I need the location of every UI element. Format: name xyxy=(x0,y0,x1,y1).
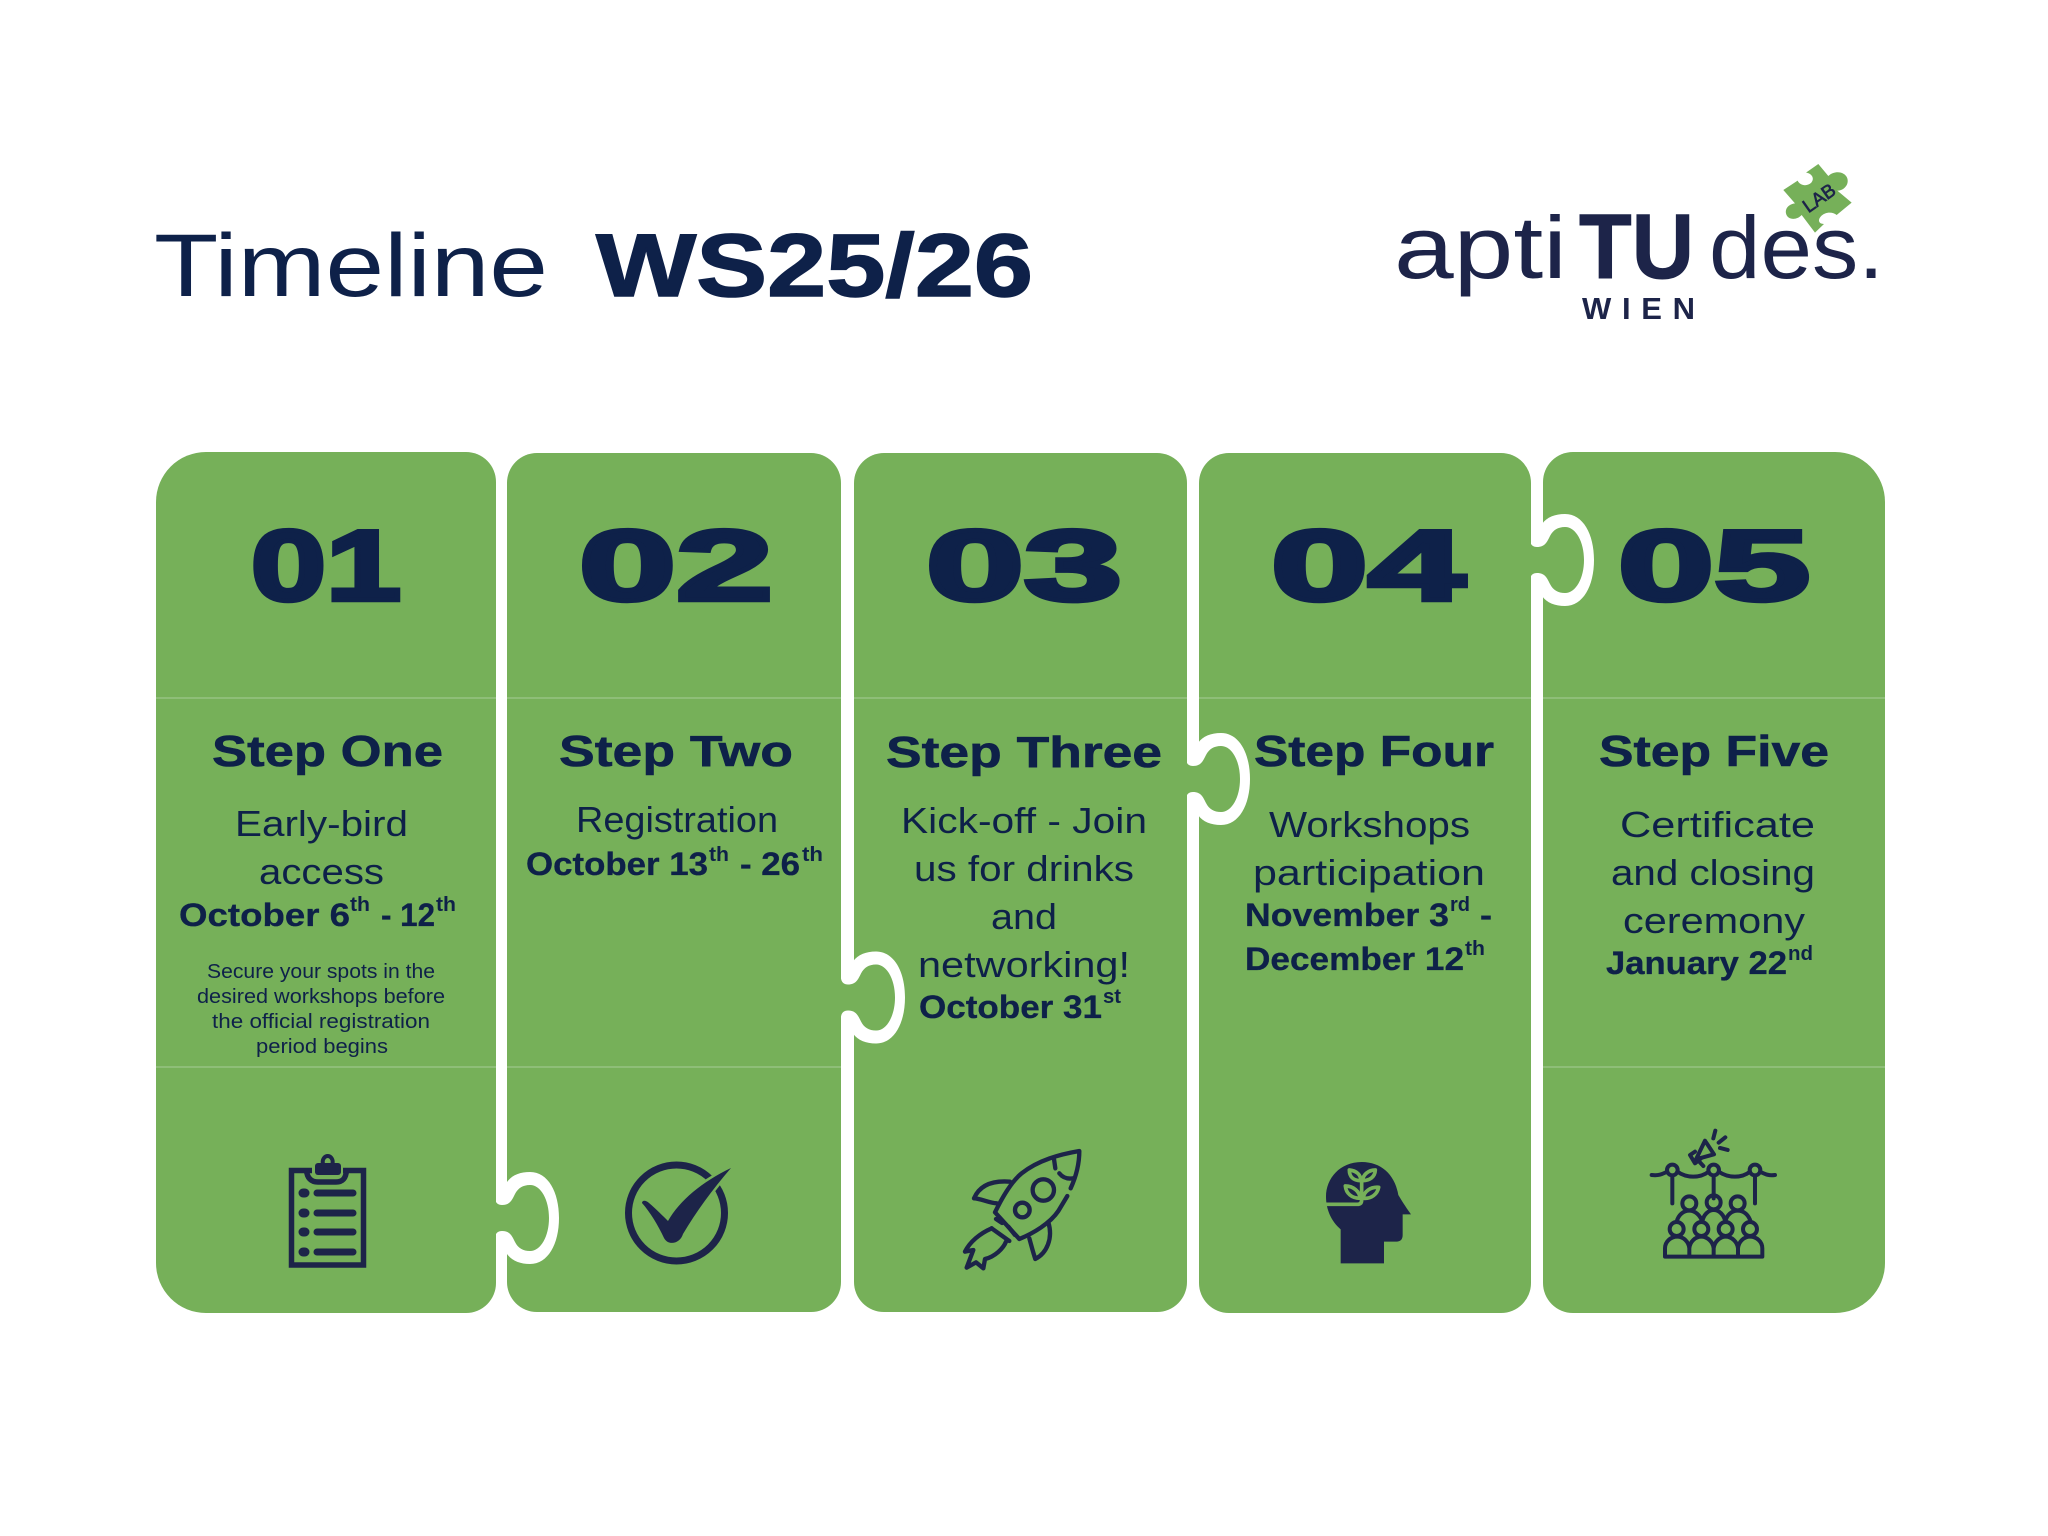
heading: Step Two: Step Two xyxy=(559,727,793,776)
description: and closing xyxy=(1611,852,1815,893)
date: October 13 xyxy=(526,846,708,882)
note: Secure your spots in the xyxy=(207,961,435,983)
note xyxy=(197,961,445,1058)
logo: aptiTUdes WIEN LAB: apti xyxy=(1394,198,1567,297)
panel: step 02 xyxy=(507,453,841,1312)
date: November 3 xyxy=(1245,897,1449,933)
description: ceremony xyxy=(1623,900,1805,941)
description: Kick-off - Join xyxy=(901,800,1147,841)
icon: crowd with megaphone xyxy=(1652,1131,1775,1257)
number 05: 05 xyxy=(1618,510,1810,622)
puzzle tab: step 4 to step 5 xyxy=(1530,514,1594,606)
note: desired workshops before xyxy=(197,986,445,1008)
logo: aptiTUdes WIEN LAB xyxy=(1394,164,1884,326)
puzzle tab: step 3 to step 4 xyxy=(1186,733,1250,825)
description: us for drinks xyxy=(914,848,1134,889)
date: October 6 xyxy=(179,897,350,933)
heading: Step Four: Step Four xyxy=(1254,727,1494,776)
date: st xyxy=(1103,986,1121,1008)
note: period begins xyxy=(256,1036,388,1058)
description: Certificate xyxy=(1620,804,1815,845)
date: - 26 xyxy=(740,846,800,882)
panel: step 05 xyxy=(1543,452,1885,1313)
number 04: 04 xyxy=(1271,510,1466,622)
icon: green puzzle piece: LAB xyxy=(1799,180,1840,217)
description xyxy=(1611,804,1815,941)
icon: head with plant xyxy=(1326,1162,1411,1263)
number 02: 02 xyxy=(579,510,773,622)
description: access xyxy=(259,851,384,892)
title xyxy=(154,215,1033,315)
title: WS25/26 xyxy=(596,215,1033,315)
date: th xyxy=(802,844,823,866)
icon: green puzzle piece xyxy=(1783,164,1852,233)
description: and xyxy=(991,896,1057,937)
date: th xyxy=(709,844,729,866)
panel: step 01 xyxy=(156,452,496,1313)
logo: aptiTUdes WIEN LAB: TU xyxy=(1579,196,1694,298)
note: the official registration xyxy=(212,1011,430,1033)
heading: Step Five: Step Five xyxy=(1599,727,1829,776)
panel: step 03 xyxy=(854,453,1187,1312)
title: Timeline xyxy=(154,215,548,315)
logo: aptiTUdes WIEN LAB: WIEN xyxy=(1582,291,1695,326)
description xyxy=(235,803,408,892)
description xyxy=(901,800,1147,985)
description: networking! xyxy=(918,944,1130,985)
puzzle tab: step 1 to step 2 xyxy=(495,1172,559,1264)
description: participation xyxy=(1253,852,1485,893)
date: nd xyxy=(1788,943,1813,965)
logo: aptiTUdes WIEN LAB: des. xyxy=(1709,198,1884,297)
date: th xyxy=(1465,938,1485,960)
date: th xyxy=(436,894,456,916)
date xyxy=(179,894,456,933)
date: - 12 xyxy=(381,897,435,933)
number 03: 03 xyxy=(926,510,1122,622)
icon: rocket xyxy=(965,1151,1079,1268)
heading: Step Three: Step Three xyxy=(886,728,1162,777)
description xyxy=(1253,804,1485,893)
heading: Step One: Step One xyxy=(212,727,443,776)
date xyxy=(526,844,823,882)
icon: clipboard xyxy=(292,1156,364,1265)
description: Early-bird xyxy=(235,803,408,844)
number 01: 01 xyxy=(251,510,401,622)
date xyxy=(1245,894,1492,977)
puzzle tab: step 2 to step 3 xyxy=(841,952,905,1044)
date: th xyxy=(350,894,370,916)
panel: step 04 xyxy=(1199,453,1531,1313)
description: Workshops xyxy=(1269,804,1470,845)
date: January 22 xyxy=(1606,945,1787,981)
date: - xyxy=(1480,897,1492,933)
date: rd xyxy=(1450,894,1470,916)
date: December 12 xyxy=(1245,941,1464,977)
date: October 31 xyxy=(919,989,1102,1025)
description: Registration xyxy=(576,799,778,840)
icon: check mark in circle xyxy=(628,1165,731,1261)
